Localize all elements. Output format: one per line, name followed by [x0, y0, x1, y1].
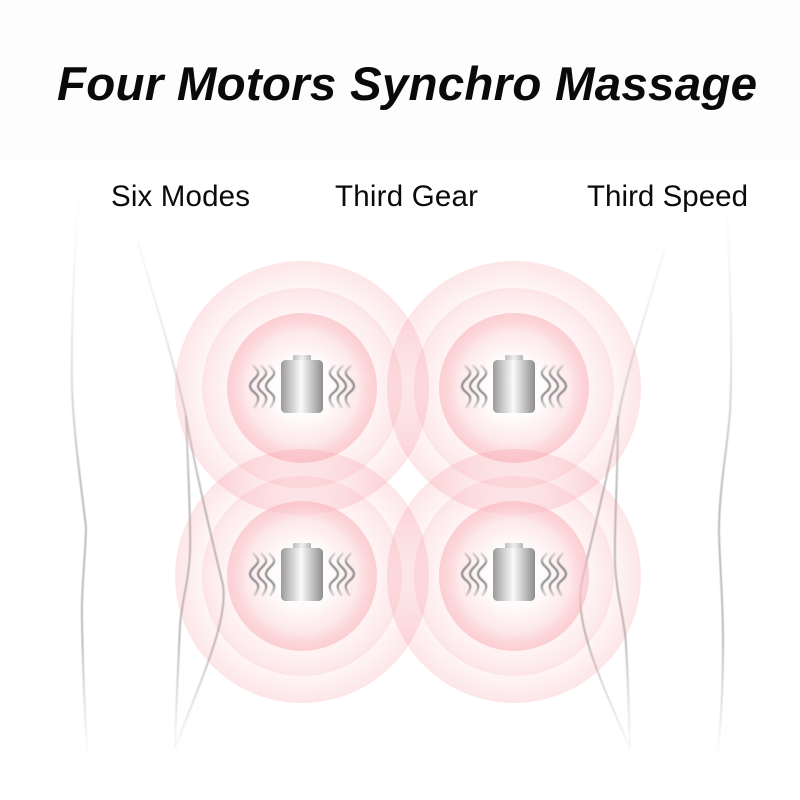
icon: right vibration waves	[542, 365, 566, 408]
title backdrop	[0, 0, 800, 185]
icon: right vibration waves	[330, 553, 354, 596]
icon: right vibration waves	[330, 365, 354, 408]
label: six modes: Six Modes	[111, 180, 250, 213]
icon: left vibration waves	[462, 553, 486, 596]
vibration rings	[387, 261, 641, 515]
icon: left vibration waves	[462, 365, 486, 408]
label: third gear: Third Gear	[335, 180, 478, 213]
icon: left vibration waves	[250, 553, 274, 596]
motor: bottom right	[387, 449, 641, 703]
icon: battery motor	[281, 543, 323, 601]
icon: battery motor	[493, 355, 535, 413]
labels row	[111, 180, 748, 213]
icon: left vibration waves	[250, 365, 274, 408]
icon: battery motor	[493, 543, 535, 601]
motor: top left	[175, 261, 429, 515]
body outline	[72, 192, 731, 788]
icon: right vibration waves	[542, 553, 566, 596]
label: third speed: Third Speed	[587, 180, 748, 213]
vibration rings	[175, 261, 429, 515]
icon: battery motor	[281, 355, 323, 413]
motor: top right	[387, 261, 641, 515]
motor: bottom left	[175, 449, 429, 703]
vibration rings	[175, 449, 429, 703]
title: Four Motors Synchro Massage	[57, 58, 757, 111]
vibration rings	[387, 449, 641, 703]
